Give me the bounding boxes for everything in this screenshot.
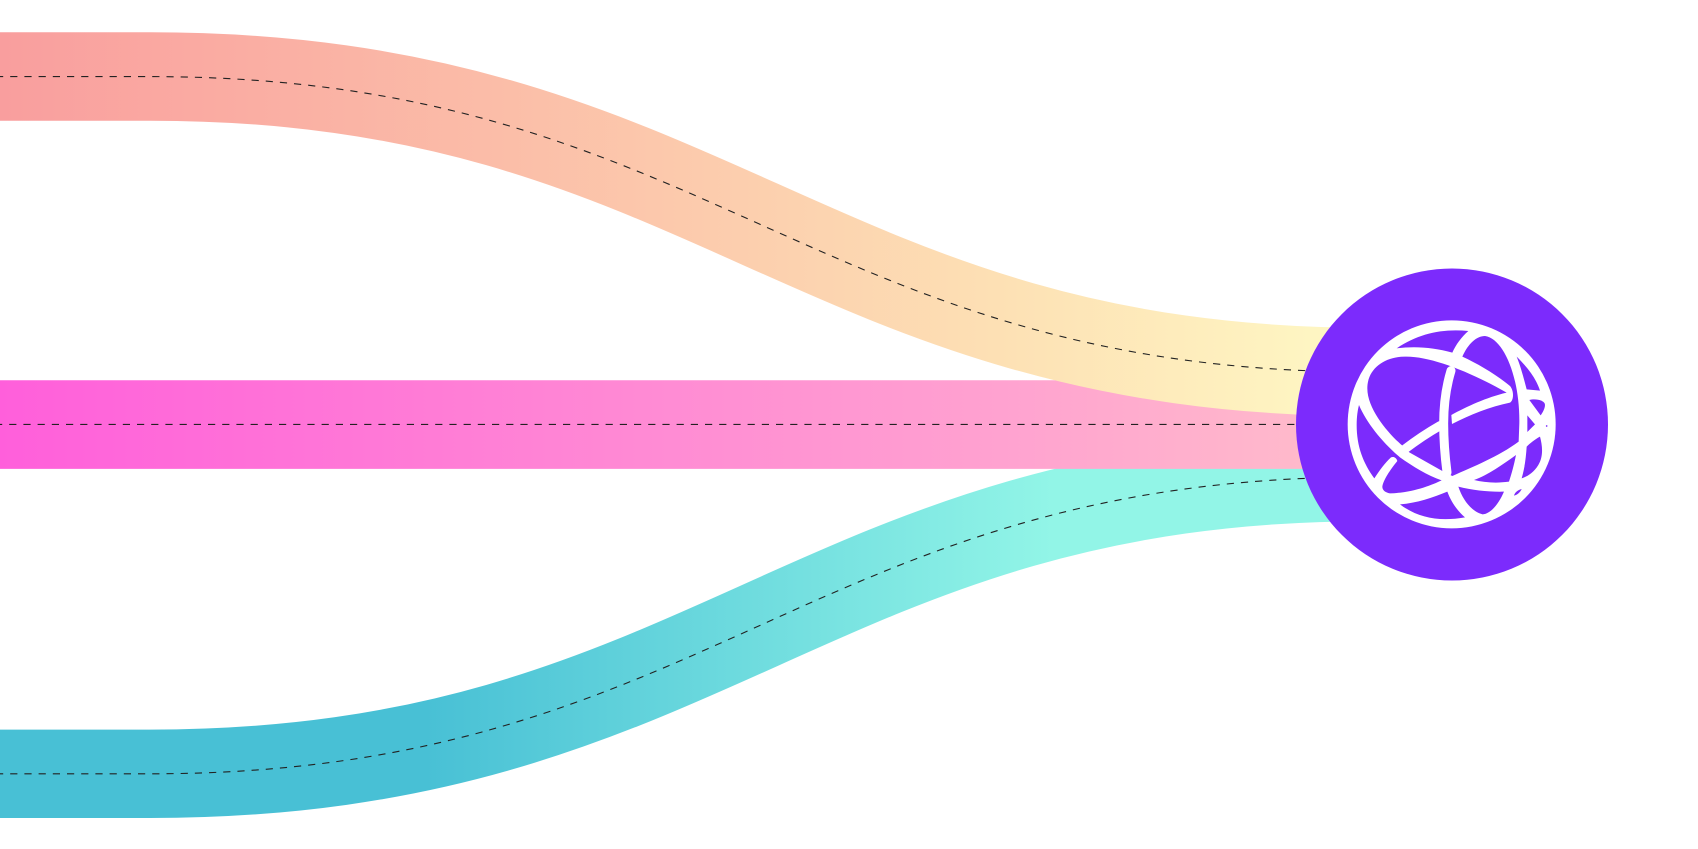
globe cut-out cells <box>1357 330 1547 519</box>
dashed line: coral flow <box>0 77 1370 372</box>
band: teal flow from bottom left <box>0 477 1452 774</box>
band: coral to yellow flow from top left <box>0 76 1452 372</box>
dashed line: pink flow <box>0 423 1300 425</box>
dashed line: teal flow <box>0 477 1370 774</box>
vertical ribbon and connecting arm <box>1405 371 1451 472</box>
band: pink flow straight across the middle <box>0 380 1452 469</box>
white globe disc <box>1348 320 1556 528</box>
icon: globe with orbit ribbons <box>1348 320 1556 528</box>
purple hub circle <box>1296 268 1608 580</box>
